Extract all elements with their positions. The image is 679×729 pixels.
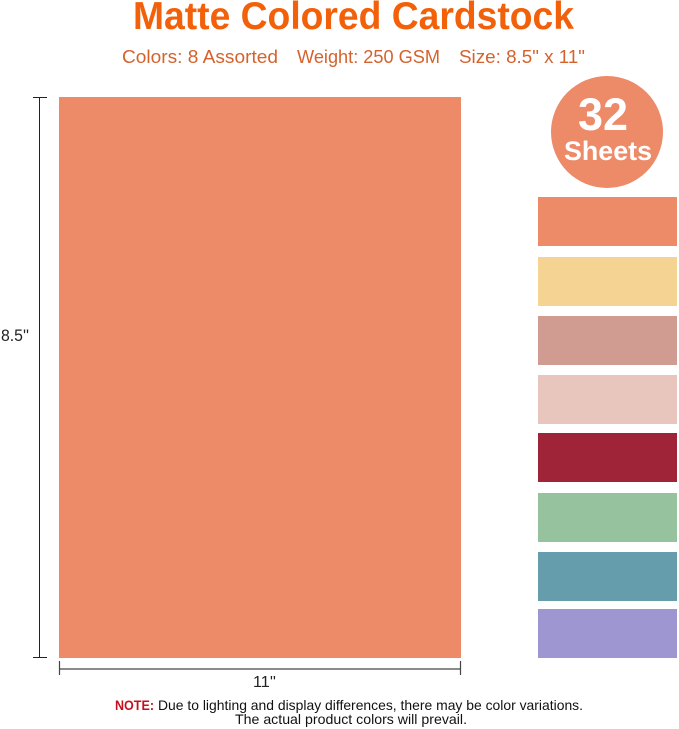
width label: 11'' xyxy=(253,674,276,691)
note text xyxy=(115,697,583,727)
swatch: dusty rose xyxy=(538,316,677,365)
note text: Due to lighting and display differences, there may be color variations. xyxy=(158,697,583,713)
height dimension line xyxy=(33,97,47,658)
swatch: yellow xyxy=(538,257,677,306)
badge: 32 sheets: 32 xyxy=(578,89,628,140)
specs subtitle: Weight: 250 GSM xyxy=(297,47,440,67)
swatch: pale pink xyxy=(538,375,677,424)
colour swatches xyxy=(538,197,677,658)
specs subtitle: Colors: 8 Assorted xyxy=(122,47,278,67)
height label: 8.5'' xyxy=(1,327,29,345)
swatch: green xyxy=(538,493,677,542)
note text: The actual product colors will prevail. xyxy=(235,711,467,727)
badge: 32 sheets: Sheets xyxy=(564,136,652,166)
swatch: lavender xyxy=(538,609,677,658)
width dimension line xyxy=(59,661,461,675)
large cardstock sheet xyxy=(59,97,461,658)
swatch: burgundy xyxy=(538,433,677,482)
specs subtitle: Size: 8.5" x 11" xyxy=(459,47,585,67)
swatch: teal xyxy=(538,552,677,601)
badge: 32 sheets xyxy=(551,76,663,188)
note text: NOTE: xyxy=(115,697,154,713)
swatch: coral xyxy=(538,197,677,246)
specs subtitle xyxy=(122,47,585,67)
